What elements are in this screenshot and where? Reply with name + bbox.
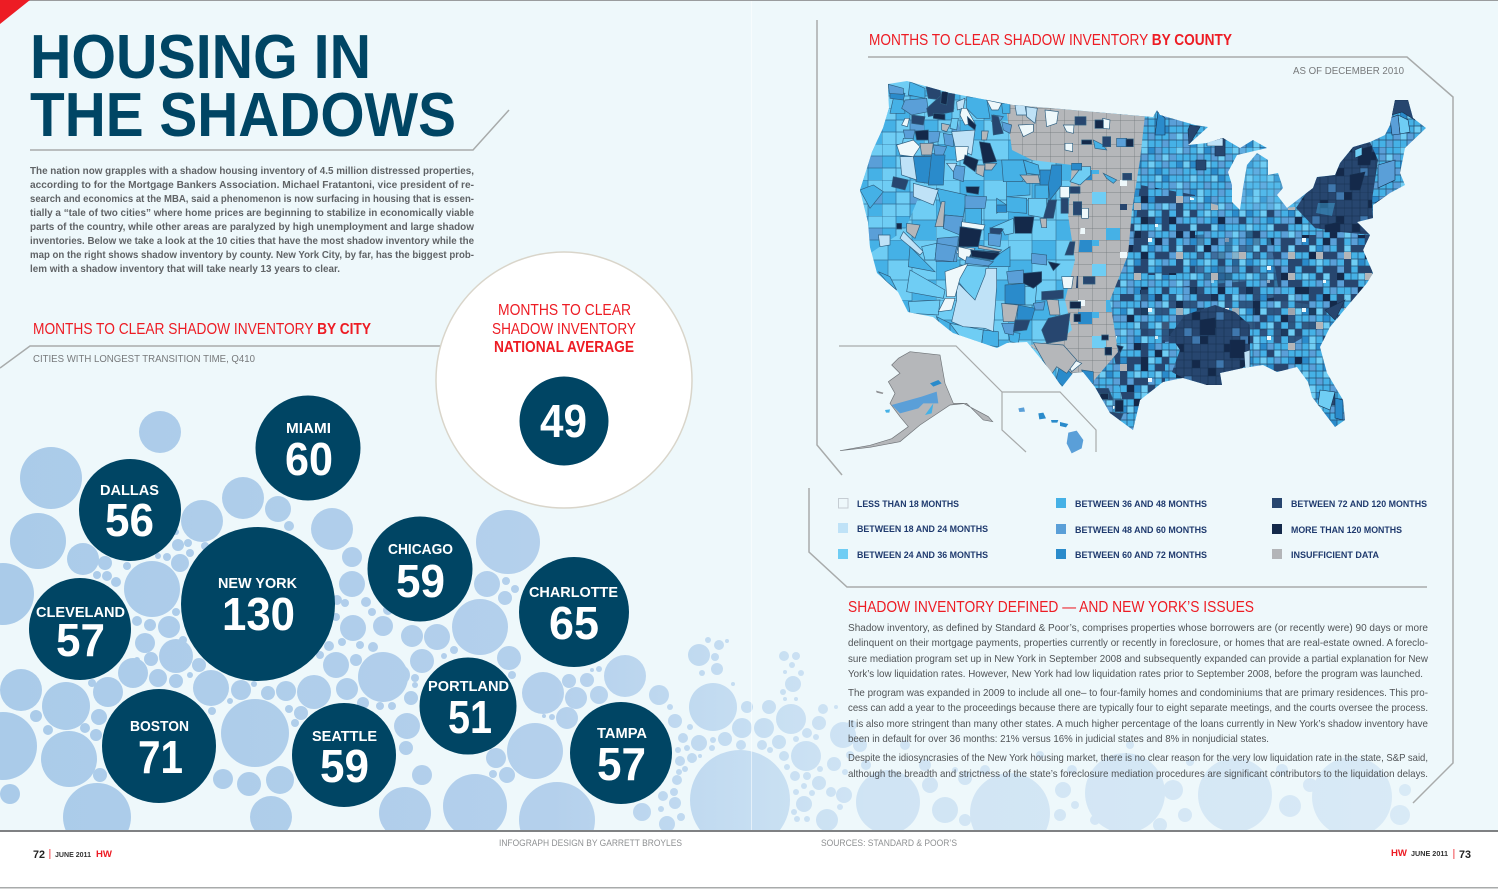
folio left: JUNE 2011 xyxy=(55,850,91,859)
title: HOUSING IN xyxy=(30,23,371,92)
northwest counties (crop-space coordinates) xyxy=(860,82,1133,262)
bubble: Chicago xyxy=(368,516,472,622)
top edge line xyxy=(0,0,1498,1)
national average callout: SHADOW INVENTORY xyxy=(492,321,636,338)
bubble: Seattle: SEATTLE xyxy=(312,728,377,745)
definition text block: Shadow inventory, as defined by Standard & Poor’s, comprises properties whose borrowers are (or recently were) 90 days or more xyxy=(848,622,1428,634)
eastern county highlights xyxy=(1155,100,1415,420)
Hawaii xyxy=(1018,407,1083,453)
bubble: Boston: 71 xyxy=(138,731,183,783)
legend item: 72 to 120: BETWEEN 72 AND 120 MONTHS xyxy=(1291,499,1427,510)
footer band xyxy=(0,830,1498,889)
bubble: Miami: MIAMI xyxy=(286,420,331,437)
bubble: Tampa xyxy=(570,702,672,804)
legend item: more than 120: MORE THAN 120 MONTHS xyxy=(1291,525,1402,536)
national average callout xyxy=(436,252,692,508)
legend item: less than 18: LESS THAN 18 MONTHS xyxy=(857,499,959,510)
contiguous states xyxy=(860,81,1426,430)
definition text block: been in default for over 36 months: 21% versus 16% in judicial states and 8% in nonjudicial states. xyxy=(848,733,1269,745)
Hawaii inset frame xyxy=(1002,392,1096,452)
folio left: 72 xyxy=(33,849,45,861)
footer top rule xyxy=(0,830,1498,832)
southwest counties (crop-space coordinates) xyxy=(878,243,1123,425)
bubble: Charlotte: 65 xyxy=(549,597,599,649)
bubble: Miami: 60 xyxy=(285,433,333,485)
bubble: Chicago: CHICAGO xyxy=(388,541,453,558)
decorative bubble field xyxy=(0,411,1411,858)
credit: design: INFOGRAPH DESIGN BY GARRETT BROYLES xyxy=(499,838,682,849)
bubble: Miami xyxy=(256,396,360,500)
legend item: 24 to 36: BETWEEN 24 AND 36 MONTHS xyxy=(857,550,988,561)
centre fold seam xyxy=(751,0,752,830)
folio right: JUNE 2011 xyxy=(1411,849,1448,858)
folio left: HW xyxy=(96,849,112,860)
intro text block: The nation now grapples with a shadow housing inventory of 4.5 million distressed properties, xyxy=(30,165,474,177)
bubble: Boston xyxy=(102,689,216,803)
heading: by county: MONTHS TO CLEAR SHADOW INVENTORY BY COUNTY xyxy=(869,32,1233,49)
national average callout: MONTHS TO CLEAR xyxy=(498,302,631,319)
heading: by city: MONTHS TO CLEAR SHADOW INVENTORY BY CITY xyxy=(33,321,372,338)
bubble: Portland: PORTLAND xyxy=(428,678,509,695)
bubble: Charlotte xyxy=(519,557,629,667)
red corner tab xyxy=(0,0,30,24)
bubble: Dallas: DALLAS xyxy=(100,482,159,499)
credit: sources: SOURCES: STANDARD & POOR’S xyxy=(821,838,957,849)
definition text block: The program was expanded in 2009 to include all one– to four-family homes and condominiums that are primary residences. This pro- xyxy=(848,687,1428,699)
legend item: insufficient data: INSUFFICIENT DATA xyxy=(1291,550,1379,561)
folio right: 73 xyxy=(1459,849,1471,861)
intro text block: map on the right shows shadow inventory by county. New York City, by far, has the biggest prob- xyxy=(30,249,474,261)
bubble: Boston: BOSTON xyxy=(130,718,189,735)
by city rule xyxy=(0,346,442,368)
folio right xyxy=(1391,848,1471,861)
bubble: Seattle: 59 xyxy=(320,740,369,792)
bubble: Dallas xyxy=(79,459,181,561)
bubble: New York: NEW YORK xyxy=(218,575,297,592)
definition text block: Despite the idiosyncrasies of the New York housing market, there is no clear reason for the very low liquidation rate in the state, S&P said, xyxy=(848,752,1428,764)
title rule xyxy=(30,110,509,150)
bubble: Portland xyxy=(420,658,516,754)
title xyxy=(30,23,456,150)
bubble: Tampa: 57 xyxy=(597,738,646,790)
legend item: 36 to 48: BETWEEN 36 AND 48 MONTHS xyxy=(1075,499,1207,510)
definition text block: York’s low liquidation rates. However, New York had low liquidation rates prior to September 2008, before the program was launched. xyxy=(848,668,1423,680)
bubble: Portland: 51 xyxy=(448,691,492,743)
definition text block: cess can add a year to the proceedings because there are typically four to eight separate meetings, and the courts oversee the process. xyxy=(848,702,1428,714)
bubble: Charlotte: CHARLOTTE xyxy=(529,584,618,601)
intro text block: search and economics at the MBA, said a phenomenon is now surfacing in housing that is essen- xyxy=(30,193,474,205)
Alaska xyxy=(840,352,993,451)
bubble: Cleveland: CLEVELAND xyxy=(36,604,125,621)
intro text block: according to for the Mortgage Bankers Association. Michael Fratantoni, vice president of re- xyxy=(30,179,474,191)
bubble: Seattle xyxy=(292,703,396,807)
folio right: HW xyxy=(1391,848,1407,859)
by city subtitle: CITIES WITH LONGEST TRANSITION TIME, Q410 xyxy=(33,353,255,365)
bubble: Cleveland: 57 xyxy=(56,614,105,666)
heading: shadow inventory defined: SHADOW INVENTORY DEFINED — AND NEW YORK’S ISSUES xyxy=(848,599,1254,616)
bubble: Cleveland xyxy=(29,578,131,680)
intro text block: lem with a shadow inventory that will take nearly 13 years to clear. xyxy=(30,263,340,275)
definition text block xyxy=(848,622,1428,780)
legend item: 48 to 60: BETWEEN 48 AND 60 MONTHS xyxy=(1075,525,1207,536)
bubble: New York: 130 xyxy=(222,588,295,640)
folio left xyxy=(33,849,112,861)
bubble: Chicago: 59 xyxy=(396,555,445,607)
bubble: Dallas: 56 xyxy=(105,494,154,546)
bubble: New York xyxy=(181,527,335,681)
panel frame: map and legend xyxy=(809,20,1453,803)
legend xyxy=(838,498,1427,561)
definition text block: although the breadth and strictness of the state’s foreclosure mediation procedures are significant contributors to the liquidation delays. xyxy=(848,768,1428,780)
legend item: 60 to 72: BETWEEN 60 AND 72 MONTHS xyxy=(1075,550,1207,561)
title: THE SHADOWS xyxy=(30,81,456,150)
as of date: AS OF DECEMBER 2010 xyxy=(1293,65,1404,77)
intro text block xyxy=(30,165,475,275)
footer bottom rule xyxy=(0,887,1498,888)
definition text block: sure mediation program set up in New York in September 2008 and subsequently expanded can provide a partial explanation for New xyxy=(848,653,1428,665)
national average callout: 49 xyxy=(540,395,587,447)
definition text block: It is also more stringent than many other states. A much higher percentage of the loans currently in New York’s shadow inventory have xyxy=(848,718,1428,730)
definition text block: delinquent on their mortgage payments, properties currently or recently in foreclosure, or homes that are real-estate owned. A foreclo- xyxy=(848,637,1428,649)
legend item: 18 to 24: BETWEEN 18 AND 24 MONTHS xyxy=(857,524,988,535)
Alaska inset frame xyxy=(839,346,1026,452)
intro text block: parts of the country, while other areas are paralyzed by high unemployment and large shadow xyxy=(30,221,475,233)
bubble: Tampa: TAMPA xyxy=(597,725,647,742)
national average callout: NATIONAL AVERAGE xyxy=(494,339,634,356)
intro text block: inventories. Below we take a look at the 10 cities that have the most shadow inventory while the xyxy=(30,235,474,247)
intro text block: tially a “tale of two cities” where home prices are beginning to stabilize in economically viable xyxy=(30,207,474,219)
